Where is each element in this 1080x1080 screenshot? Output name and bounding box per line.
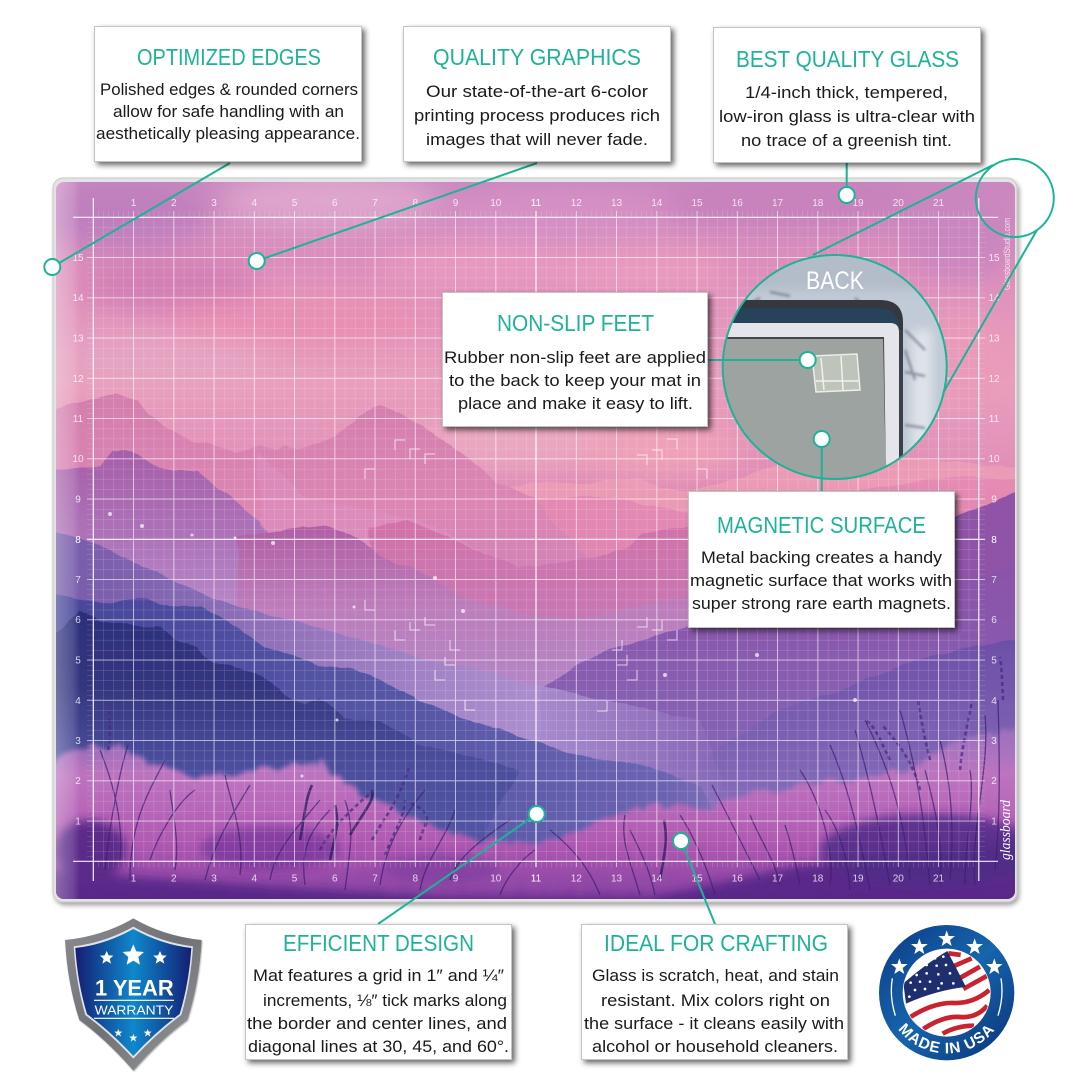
body text	[690, 548, 952, 613]
grass blades	[100, 700, 999, 895]
left scale numbers: 9	[75, 494, 81, 506]
right scale numbers: 4	[991, 696, 997, 707]
top scale numbers: 5	[292, 198, 298, 209]
left scale numbers: 15	[72, 253, 84, 264]
body text: Rubber non-slip feet are applied	[444, 348, 706, 367]
corner magnifier circle	[976, 159, 1054, 237]
left scale numbers: 1	[75, 816, 81, 828]
body text: low-iron glass is ultra-clear with	[719, 107, 975, 126]
left scale numbers: 5	[75, 656, 81, 666]
body text: Glass is scratch, heat, and stain	[592, 966, 839, 985]
bottom scale numbers: 17	[772, 874, 783, 884]
body text: no trace of a greenish tint.	[741, 131, 952, 150]
angle marks	[365, 439, 707, 711]
shield frame	[65, 918, 202, 1071]
bottom scale numbers: 3	[211, 874, 217, 884]
top scale numbers: 10	[490, 198, 502, 209]
heading: QUALITY GRAPHICS	[433, 44, 641, 70]
ridge C: magenta range	[236, 526, 688, 658]
left scale numbers: 6	[75, 615, 81, 626]
left scale numbers: 4	[75, 696, 81, 707]
warranty rules	[94, 1000, 174, 1018]
right scale numbers	[988, 253, 1000, 828]
top scale numbers: 2	[171, 198, 177, 209]
right scale numbers: 15	[988, 253, 1000, 264]
bottom scale numbers: 18	[812, 874, 824, 884]
right scale numbers: 6	[991, 615, 997, 626]
panel: non-slip feet	[442, 292, 708, 426]
top scale numbers: 6	[332, 198, 338, 209]
heading: MAGNETIC SURFACE	[717, 512, 926, 538]
BACK label: BACK	[806, 267, 864, 295]
body text: super strong rare earth magnets.	[692, 594, 951, 613]
ridge B: left mauve	[56, 450, 269, 606]
glass cutting mat	[30, 172, 1040, 920]
right purple ranges	[544, 626, 964, 787]
top scale numbers: 21	[933, 198, 944, 209]
bottom scale numbers: 14	[651, 874, 663, 884]
bottom scale numbers: 8	[413, 874, 419, 884]
left scale numbers: 2	[75, 776, 81, 787]
right scale numbers: 10	[988, 454, 1000, 465]
body text: magnetic surface that works with	[690, 571, 952, 590]
large stars	[100, 944, 167, 965]
left glass highlight	[56, 182, 80, 899]
panel: magnetic surface	[688, 492, 954, 628]
top scale numbers: 3	[211, 198, 217, 209]
top scale numbers: 8	[413, 198, 419, 209]
body text: allow for safe handling with an	[113, 102, 344, 121]
shield blue face	[75, 929, 191, 1056]
bottom scale numbers: 2	[171, 874, 177, 884]
heading: NON-SLIP FEET	[497, 310, 654, 336]
left scale numbers: 14	[72, 293, 84, 304]
bottom scale numbers: 21	[933, 874, 944, 884]
bottom scale numbers	[131, 874, 944, 884]
top scale numbers: 11	[531, 198, 542, 209]
body text	[584, 966, 844, 1056]
body text	[247, 966, 509, 1056]
callout leader lines	[52, 163, 847, 924]
bottom scale numbers: 11	[531, 874, 542, 884]
bottom scale numbers: 4	[252, 874, 258, 884]
ruler numbers	[72, 198, 1014, 884]
body text: alcohol or household cleaners.	[592, 1037, 838, 1056]
body text	[719, 83, 975, 150]
panel: efficient design	[246, 924, 512, 1060]
bottom scale numbers: 12	[571, 874, 582, 884]
top scale numbers: 17	[772, 198, 783, 209]
left scale numbers: 13	[72, 334, 84, 344]
heading: OPTIMIZED EDGES	[137, 44, 321, 70]
right scale numbers: 14	[988, 293, 1000, 304]
ridge E: lavender left	[56, 532, 704, 783]
top scale numbers	[131, 198, 944, 209]
ridge A: peak at centre	[56, 393, 589, 568]
body text	[444, 348, 706, 413]
top scale numbers: 18	[812, 198, 824, 209]
right dark mountain	[955, 492, 1015, 586]
badge curved text: MADE IN USA	[898, 1022, 994, 1054]
ridge F: navy	[56, 594, 710, 844]
heading: BEST QUALITY GLASS	[736, 46, 959, 72]
ridge D: pink range	[368, 520, 688, 619]
body text: to the back to keep your mat in	[449, 371, 701, 390]
mountain ranges	[40, 392, 1030, 860]
bottom scale numbers: 20	[893, 874, 904, 884]
heading: IDEAL FOR CRAFTING	[604, 930, 828, 956]
panel: best quality glass	[714, 28, 980, 162]
body text	[96, 80, 360, 143]
top scale numbers: 15	[691, 198, 703, 209]
ridge G: deep navy treeline	[56, 610, 520, 840]
shield inner edge	[74, 927, 193, 1059]
bottom scale numbers: 13	[611, 874, 622, 884]
warranty label: WARRANTY	[95, 1002, 173, 1017]
right scale numbers: 12	[988, 374, 1000, 385]
far peaks right	[510, 460, 1015, 512]
glassboard logo: glassboard	[998, 800, 1014, 860]
bottom darkness	[40, 814, 1040, 910]
left scale numbers: 3	[75, 736, 81, 747]
left scale numbers: 12	[72, 374, 84, 385]
left scale numbers	[72, 253, 84, 828]
bottom scale numbers: 5	[292, 874, 298, 884]
top scale numbers: 7	[372, 198, 378, 209]
body text: increments, ⅛″ tick marks along	[263, 991, 507, 1010]
body text: resistant. Mix colors right on	[601, 991, 830, 1010]
body text: place and make it easy to lift.	[458, 394, 693, 413]
heading: EFFICIENT DESIGN	[283, 930, 474, 956]
paint flecks	[108, 512, 857, 778]
lens photo	[720, 250, 950, 480]
bottom scale numbers: 19	[852, 874, 864, 884]
lens ring	[723, 255, 947, 479]
left scale numbers: 10	[72, 454, 84, 465]
body text: images that will never fade.	[426, 130, 648, 149]
right scale numbers: 3	[991, 736, 997, 747]
left scale numbers: 7	[75, 575, 81, 586]
bottom scale numbers: 15	[691, 874, 703, 884]
top scale numbers: 9	[453, 198, 459, 209]
panel: ideal for crafting	[582, 924, 848, 1060]
right scale numbers: 5	[991, 656, 997, 666]
bottom scale numbers: 10	[490, 874, 502, 884]
mat artwork: mountain landscape	[30, 172, 1040, 920]
small stars	[114, 1029, 152, 1042]
right scale numbers: 1	[991, 816, 997, 828]
cutting grid	[73, 198, 998, 881]
bottom scale numbers: 16	[732, 874, 743, 884]
body text: printing process produces rich	[414, 106, 660, 125]
lens tangent lines	[813, 165, 1037, 393]
badge stars	[891, 930, 1003, 974]
body text: Polished edges & rounded corners	[100, 80, 358, 99]
bottom scale numbers: 7	[372, 874, 378, 884]
body text: the surface - it cleans easily with	[584, 1014, 844, 1033]
right scale numbers: 9	[991, 494, 997, 506]
body text: 1/4-inch thick, tempered,	[745, 83, 948, 102]
right scale numbers: 8	[991, 535, 997, 546]
top scale numbers: 1	[131, 198, 137, 209]
top scale numbers: 19	[852, 198, 864, 209]
grass mass	[56, 727, 1015, 899]
left scale numbers: 11	[73, 414, 84, 425]
flag circle	[903, 949, 991, 1037]
rubber foot	[812, 354, 860, 392]
bottom scale numbers: 6	[332, 874, 338, 884]
badge disc	[879, 925, 1014, 1060]
top scale numbers: 12	[571, 198, 582, 209]
flag	[903, 951, 989, 1034]
body text: Metal backing creates a handy	[701, 548, 943, 567]
panel: quality graphics	[404, 26, 670, 162]
badge side arcs	[891, 978, 1002, 1016]
right scale numbers: 11	[989, 414, 1000, 425]
bottom scale numbers: 9	[453, 874, 459, 884]
callout anchor dots	[44, 187, 855, 849]
body text	[414, 82, 660, 149]
right scale numbers: 7	[991, 575, 997, 586]
top scale numbers: 16	[732, 198, 743, 209]
top scale numbers: 13	[611, 198, 622, 209]
panel: optimized edges	[94, 26, 362, 162]
left scale numbers: 8	[75, 535, 81, 546]
body text: Mat features a grid in 1″ and ¼″	[253, 966, 504, 985]
top scale numbers: 20	[893, 198, 904, 209]
bottom scale numbers: 1	[131, 874, 137, 884]
sky clouds	[30, 172, 1020, 474]
website text: GlassboardStudio.com	[1002, 218, 1012, 290]
body text: the border and center lines, and	[247, 1014, 507, 1033]
body text: diagonal lines at 30, 45, and 60°.	[248, 1037, 509, 1056]
warranty title: 1 YEAR	[95, 975, 174, 1000]
body text: Our state-of-the-art 6-color	[426, 82, 648, 101]
right scale numbers: 13	[988, 334, 1000, 344]
badge: made in USA	[879, 925, 1014, 1060]
right scale numbers: 2	[991, 776, 997, 787]
top scale numbers: 14	[651, 198, 663, 209]
lens: back of mat	[720, 165, 1037, 480]
top scale numbers: 4	[252, 198, 258, 209]
mat glass edge	[53, 178, 1017, 902]
badge: 1 year warranty shield	[65, 918, 202, 1071]
body text: aesthetically pleasing appearance.	[96, 124, 360, 143]
